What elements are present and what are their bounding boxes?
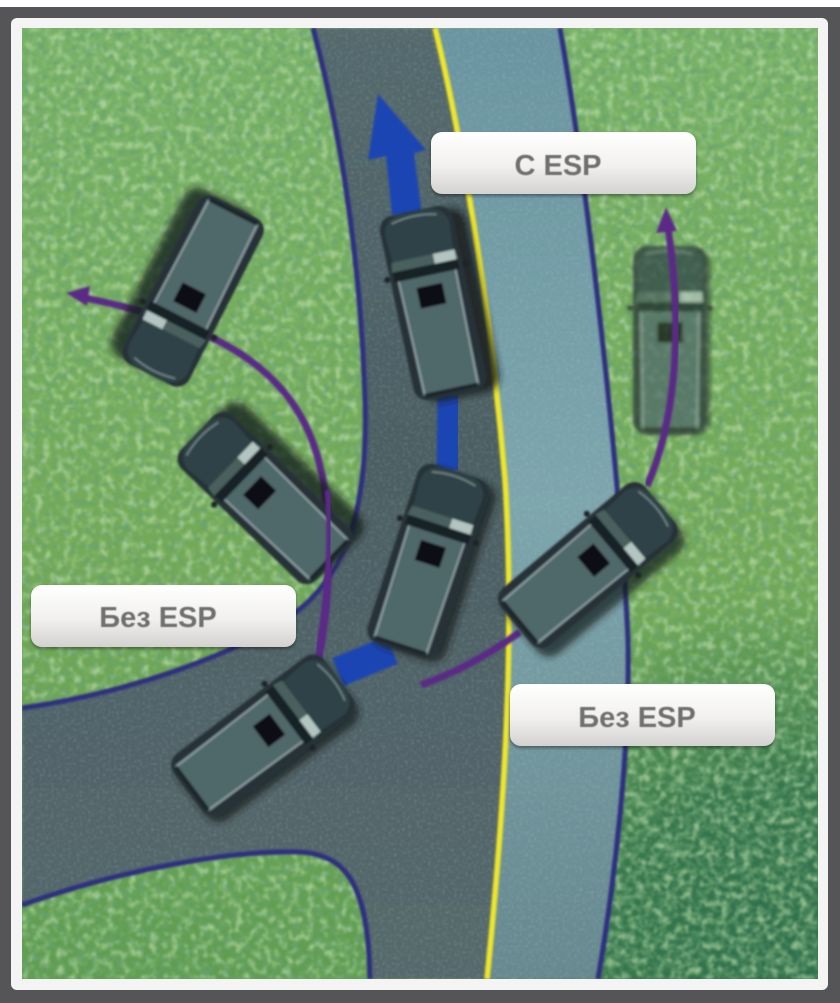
purple arrow: right trajectory without ESP bbox=[647, 207, 677, 486]
label: with ESP bbox=[431, 132, 696, 194]
purple arrow: left trajectory without ESP (tail under upper car) bbox=[66, 286, 329, 660]
car: right skidding bbox=[496, 480, 689, 662]
label: without ESP right bbox=[510, 684, 775, 746]
label: without ESP right: Без ESP bbox=[578, 702, 696, 734]
road surface bbox=[22, 28, 628, 979]
car: lower left skidding bbox=[176, 398, 368, 586]
car: upper left off road bbox=[106, 183, 274, 394]
purple overlay on lower left car bbox=[318, 490, 330, 660]
car: with ESP middle bbox=[358, 458, 500, 666]
label: with ESP: С ESP bbox=[514, 150, 602, 182]
label: without ESP left: Без ESP bbox=[99, 602, 217, 634]
car: entering curve bbox=[170, 653, 363, 826]
purple path: right skid start bbox=[421, 632, 520, 685]
label: without ESP left bbox=[31, 585, 296, 647]
blue arrow: path with ESP bbox=[338, 94, 452, 672]
car: ghost on right verge bbox=[627, 246, 713, 436]
car: with ESP upper bbox=[371, 202, 503, 405]
